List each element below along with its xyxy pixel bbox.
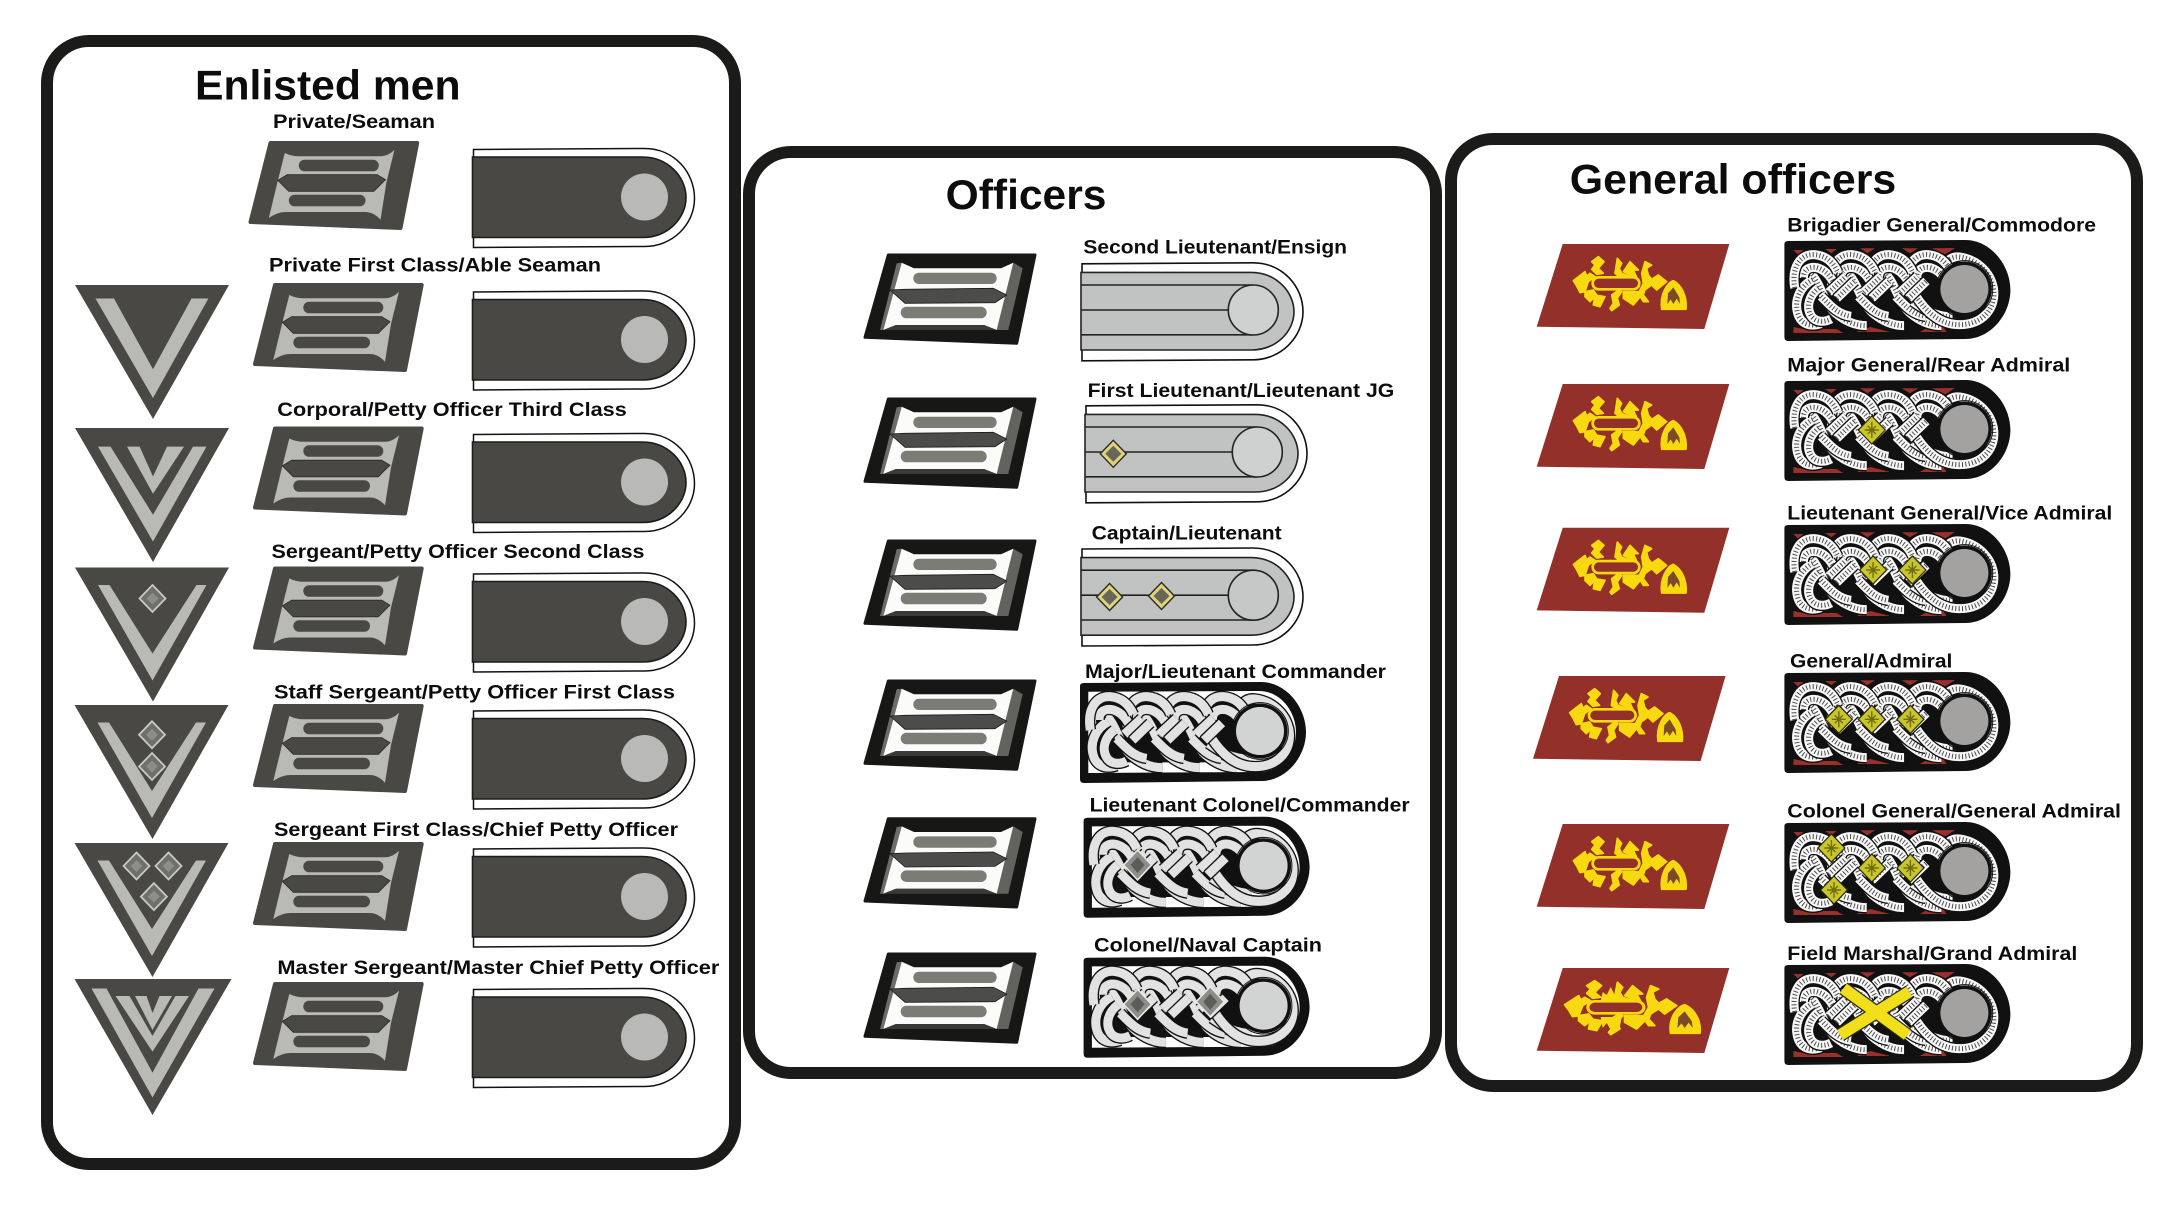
label: Colonel/Naval Captain (1094, 936, 1322, 957)
icon: sleeve chevron with one pip (75, 568, 229, 702)
label: Staff Sergeant/Petty Officer First Class (274, 682, 675, 703)
icon: collar patch (255, 428, 422, 514)
icon: collar patch (255, 984, 422, 1069)
label: Private/Seaman (273, 112, 435, 133)
icon: shoulder board (1081, 263, 1303, 361)
icon: collar patch (865, 541, 1035, 629)
icon: sleeve chevron with three pips (74, 843, 228, 977)
label: General/Admiral (1790, 651, 1952, 672)
icon: collar patch (865, 399, 1035, 487)
icon: shoulder board (472, 434, 694, 532)
rank row: Lieutenant Colonel/Commander (865, 796, 1410, 918)
icon: shoulder board (472, 988, 694, 1088)
label: Lieutenant Colonel/Commander (1090, 796, 1410, 817)
icon: red collar patch (1537, 528, 1729, 613)
icon: collar patch (255, 568, 422, 654)
label: Captain/Lieutenant (1092, 524, 1282, 544)
label: Private First Class/Able Seaman (269, 256, 601, 277)
rank row: Field Marshal/Grand Admiral (1537, 944, 2077, 1065)
icon: collar patch (255, 844, 422, 929)
panel: Officers (749, 152, 1436, 1073)
icon: red collar patch (1537, 244, 1729, 329)
icon: collar patch (865, 681, 1035, 769)
icon: collar patch (865, 255, 1035, 343)
rank row: Corporal/Petty Officer Third Class (75, 400, 694, 562)
heading: Enlisted men: Enlisted men (195, 62, 461, 108)
rank row: Sergeant First Class/Chief Petty Officer (74, 820, 694, 977)
icon: general shoulder board (1784, 240, 2010, 341)
label: Lieutenant General/Vice Admiral (1787, 503, 2112, 524)
label: Sergeant First Class/Chief Petty Officer (274, 820, 679, 841)
icon: sleeve chevron triple (74, 979, 232, 1115)
label: Corporal/Petty Officer Third Class (277, 400, 627, 421)
icon: sleeve chevron (75, 428, 229, 562)
heading: Officers: Officers (946, 171, 1106, 218)
icon: collar patch (255, 706, 422, 791)
rank row: Captain/Lieutenant (865, 524, 1303, 646)
rank row: Private First Class/Able Seaman (75, 256, 694, 419)
icon: general shoulder board with one pip (1784, 380, 2010, 481)
panel: Enlisted men (47, 41, 735, 1164)
icon: sleeve chevron (75, 285, 229, 419)
rank row: Major General/Rear Admiral (1537, 356, 2070, 481)
icon: collar patch (250, 143, 417, 228)
icon: shoulder board (472, 573, 694, 672)
icon: red collar patch with wide emblem (1537, 968, 1729, 1053)
rank row: Colonel/Naval Captain (865, 936, 1322, 1058)
icon: braided shoulder board with two pips (1084, 957, 1310, 1058)
rank row: Master Sergeant/Master Chief Petty Officer (74, 958, 720, 1115)
label: Field Marshal/Grand Admiral (1787, 944, 2077, 965)
heading: General officers: General officers (1570, 155, 1896, 202)
panel frame (47, 41, 735, 1164)
icon: general shoulder board with crossed batons (1784, 964, 2010, 1065)
icon: red collar patch (1537, 824, 1729, 909)
rank row: Second Lieutenant/Ensign (865, 238, 1347, 361)
panel frame (749, 152, 1436, 1073)
label: Brigadier General/Commodore (1787, 216, 2096, 237)
icon: shoulder board with two pips (1081, 548, 1303, 646)
rank row: General/Admiral (1533, 651, 2010, 773)
icon: sleeve chevron with two pips (74, 705, 228, 839)
icon: shoulder board (472, 148, 694, 248)
panel: General officers (1451, 139, 2137, 1086)
rank row: Private/Seaman (250, 112, 694, 248)
panel frame (1451, 139, 2137, 1086)
label: Major General/Rear Admiral (1787, 356, 2070, 377)
label: Major/Lieutenant Commander (1085, 662, 1387, 683)
icon: braided shoulder board with one pip (1084, 817, 1310, 918)
label: Colonel General/General Admiral (1787, 801, 2121, 822)
icon: general shoulder board with three pips (1784, 672, 2010, 773)
rank row: Major/Lieutenant Commander (865, 662, 1387, 783)
icon: shoulder board (472, 291, 694, 390)
rank row: Brigadier General/Commodore (1537, 216, 2096, 341)
label: Master Sergeant/Master Chief Petty Officer (277, 958, 720, 979)
icon: red collar patch (1533, 676, 1726, 761)
icon: collar patch (865, 819, 1035, 907)
icon: collar patch (255, 285, 422, 370)
rank row: Lieutenant General/Vice Admiral (1537, 503, 2112, 625)
icon: collar patch (865, 954, 1035, 1042)
rank row: Staff Sergeant/Petty Officer First Class (74, 682, 694, 839)
icon: general shoulder board with four pips (1784, 822, 2010, 923)
icon: shoulder board (472, 710, 694, 809)
rank row: Colonel General/General Admiral (1537, 801, 2121, 923)
icon: red collar patch (1537, 384, 1729, 469)
label: Sergeant/Petty Officer Second Class (272, 542, 644, 563)
icon: shoulder board (472, 848, 694, 947)
icon: braided shoulder board (1080, 682, 1306, 783)
rank row: Sergeant/Petty Officer Second Class (75, 542, 694, 702)
label: First Lieutenant/Lieutenant JG (1088, 381, 1394, 402)
rank row: First Lieutenant/Lieutenant JG (865, 381, 1394, 503)
icon: shoulder board with one pip (1085, 405, 1307, 503)
label: Second Lieutenant/Ensign (1083, 238, 1347, 259)
icon: general shoulder board with two pips (1784, 524, 2010, 625)
